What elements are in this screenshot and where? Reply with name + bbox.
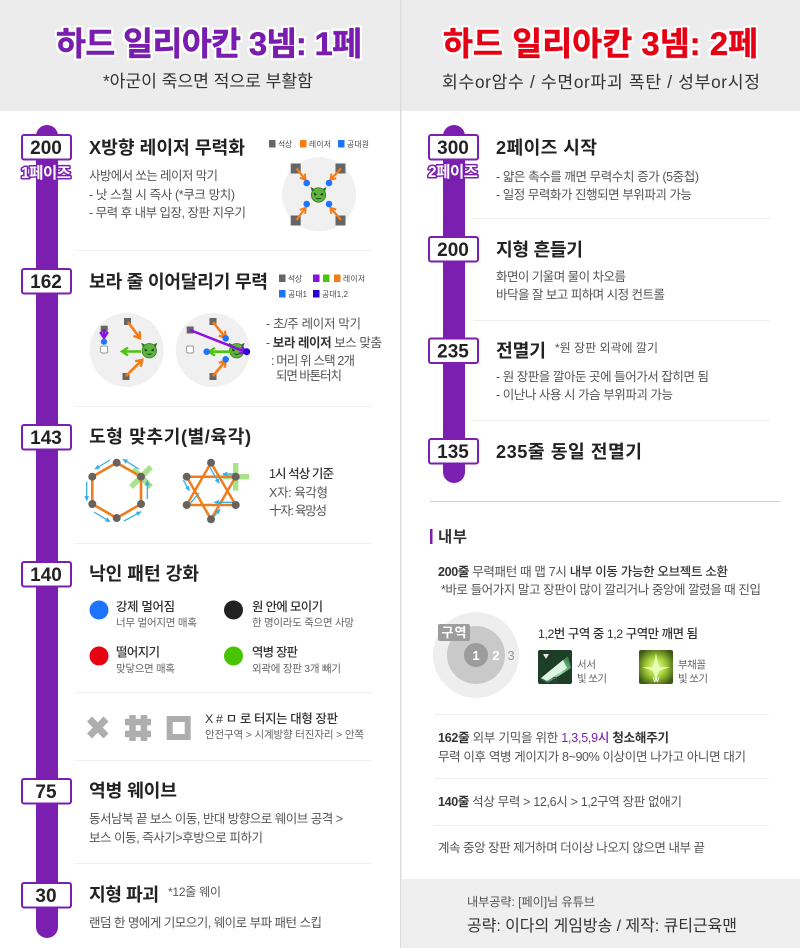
- heading: 도형 맞추기(별/육각): [89, 427, 251, 447]
- hp marker 200: [22, 135, 71, 160]
- panel: left header: [0, 0, 400, 111]
- section: phase 2 start: [428, 135, 699, 202]
- icon: hash: [125, 715, 151, 741]
- heading: 2페이즈 시작: [496, 138, 597, 158]
- skill: standing beam: 서서: [577, 659, 596, 671]
- timeline bar: phase 1: [36, 125, 58, 938]
- panel: right header: [401, 0, 800, 111]
- description: 사방에서 쏘는 레이저 막기: [89, 169, 218, 183]
- hp marker 200: 200: [437, 240, 469, 261]
- item: blue: [90, 600, 197, 629]
- diagram: relay step 2: [176, 313, 250, 387]
- diagram: zones: 3: [507, 648, 515, 663]
- section: plague wave: [22, 779, 343, 845]
- hp marker 75: 75: [35, 782, 57, 803]
- item: red: [90, 646, 175, 675]
- diagram: zones: 구역: [442, 625, 466, 640]
- description: - 보라 레이저 보스 맞춤: [266, 335, 382, 350]
- description: 안전구역 > 시계방향 터진자리 > 안쪽: [205, 729, 364, 741]
- legend: 공대원: [347, 140, 369, 149]
- description: [89, 812, 343, 845]
- skill: cone beam: 빛 쏘기: [678, 673, 708, 685]
- diagram: X laser: [282, 157, 356, 231]
- hp marker 75: [22, 779, 71, 804]
- phase 2 tag: 2페이즈: [428, 163, 478, 181]
- text: ending line: 계속 중앙 장판 제거하며 더이상 나오지 않으면 내부 끝: [438, 841, 705, 855]
- description: 랜덤 한 명에게 기모으기, 웨이로 부파 패턴 스킵: [89, 916, 322, 930]
- item: green: [224, 646, 341, 675]
- intro text: [438, 565, 761, 597]
- skill: standing beam: Q: [552, 677, 558, 684]
- item: blue: 너무 멀어지면 매혹: [116, 616, 197, 629]
- item: green: 외곽에 장판 3개 빼기: [252, 663, 341, 675]
- description: - 원 장판을 깔아둔 곳에 들어가서 잡히면 됨: [496, 370, 709, 384]
- section: large floor patterns: [90, 711, 364, 741]
- item: red: 떨어지기: [116, 646, 160, 660]
- legend: 레이저: [343, 274, 365, 284]
- text: 162 line: [438, 730, 746, 764]
- item: green: 역병 장판: [252, 646, 298, 660]
- legend: 석상: [278, 139, 292, 149]
- heading: 235줄 동일 전멸기: [496, 442, 642, 462]
- legend: [279, 274, 365, 299]
- description: - 초/주 레이저 막기: [266, 317, 361, 331]
- hp marker 30: [22, 883, 71, 908]
- diagram: zones: 2: [492, 648, 500, 663]
- note: *원 장판 외곽에 깔기: [555, 341, 658, 355]
- title: phase 1: 하드 일리아칸 3넴: 1페: [56, 26, 362, 62]
- description: - 일정 무력화가 진행되면 부위파괴 가능: [496, 187, 692, 202]
- skill: cone beam: [639, 650, 708, 685]
- description: [496, 270, 665, 302]
- intro text: 200줄 무력패턴 때 맵 7시 내부 이동 가능한 오브젝트 소환: [438, 565, 728, 579]
- skill: standing beam: 빛 쏘기: [577, 673, 607, 685]
- section: terrain shake: [429, 237, 665, 302]
- heading: 전멸기: [496, 341, 546, 361]
- section: shape matching: [22, 425, 334, 523]
- item: black: 한 명이라도 죽으면 사망: [252, 617, 354, 629]
- subtitle: phase 2: 회수or암수 / 수면or파괴 폭탄 / 성부or시정: [442, 72, 760, 92]
- title: phase 2: 하드 일리아칸 3넴: 2페: [443, 26, 758, 62]
- zone caption: 1,2번 구역 중 1,2 구역만 깨면 됨: [538, 627, 698, 641]
- text: 140 line: 140줄 석상 무력 > 12,6시 > 1,2구역 장판 없애기: [438, 795, 682, 809]
- section: X laser neutralize: [21, 135, 369, 231]
- hp marker 235: 235: [437, 342, 469, 362]
- section: repeat wipe: [429, 439, 642, 464]
- diagram: hexagram: [183, 459, 249, 523]
- description: 바닥을 잘 보고 피하며 시정 컨트롤: [496, 288, 665, 302]
- hp marker 135: 135: [437, 442, 469, 463]
- diagram: relay step 1: [90, 313, 164, 387]
- hp marker 200: 200: [30, 138, 62, 159]
- description: [496, 170, 699, 202]
- hp marker 235: [429, 338, 478, 363]
- description: - 무력 후 내부 입장, 장판 지우기: [89, 206, 246, 220]
- hp marker 140: [22, 562, 71, 586]
- text: 162 line: 무력 이후 역병 게이지가 8~90% 이상이면 나가고 아니면 대기: [438, 750, 746, 764]
- description: [89, 169, 246, 220]
- description: 동서남북 끝 보스 이동, 반대 방향으로 웨이브 공격 >: [89, 812, 343, 826]
- hp marker 162: [22, 269, 71, 294]
- skill: cone beam: 부채꼴: [678, 659, 706, 671]
- heading: 낙인 패턴 강화: [89, 564, 199, 584]
- footer credit: inner guide: 내부공략: [페이]님 유튜브: [467, 895, 595, 909]
- description: [205, 711, 364, 741]
- diagram: zones: 1: [472, 648, 480, 663]
- description: - 이난나 사용 시 가슴 부위파괴 가능: [496, 388, 673, 402]
- section: wipe attack: [429, 338, 709, 402]
- legend: 석상: [288, 274, 302, 284]
- description: [496, 370, 709, 402]
- hp marker 300: [429, 135, 478, 160]
- description: 화면이 기울며 물이 차오름: [496, 270, 626, 284]
- legend: 공대1,2: [322, 290, 348, 299]
- intro text: *바로 들어가지 말고 장판이 많이 깔리거나 중앙에 깔렸을 때 진입: [441, 583, 761, 597]
- description: 1시 석상 기준: [269, 467, 334, 481]
- legend: 레이저: [309, 139, 331, 149]
- description: [269, 467, 334, 518]
- description: 十자: 육망성: [269, 504, 327, 518]
- diagram: hexagon: [87, 459, 151, 522]
- description: X # ㅁ 로 터지는 대형 장판: [205, 711, 338, 726]
- heading: X방향 레이저 무력화: [89, 138, 245, 158]
- section: purple line relay: [22, 269, 382, 387]
- item: black: [224, 600, 354, 629]
- section: terrain destruction: [22, 883, 322, 930]
- hp marker 162: 162: [30, 272, 62, 293]
- hp marker 143: 143: [30, 428, 62, 449]
- item: blue: 강제 멀어짐: [116, 600, 175, 614]
- text: 162 line: 162줄 외부 기믹을 위한 1,3,5,9시 청소해주기: [438, 730, 669, 745]
- hp marker 200: [429, 237, 478, 262]
- section: brand patterns: [22, 562, 354, 675]
- hp marker 135: [429, 439, 478, 464]
- item: black: 원 안에 모이기: [252, 600, 323, 614]
- legend: 공대1: [288, 290, 307, 299]
- description: 되면 바톤터치: [276, 369, 342, 383]
- footer credit: authors: 공략: 이다의 게임방송 / 제작: 큐티근육맨: [467, 917, 737, 935]
- skill: standing beam: [538, 650, 607, 685]
- heading: 지형 흔들기: [496, 240, 583, 260]
- description: : 머리 위 스택 2개: [271, 354, 355, 368]
- timeline bar: phase 2: [443, 125, 465, 483]
- panel: inner phase: [430, 528, 761, 855]
- heading: 지형 파괴: [89, 885, 159, 905]
- item: red: 맞닿으면 매혹: [116, 662, 175, 675]
- panel: footer: [401, 879, 800, 948]
- hp marker 143: [22, 425, 71, 450]
- heading: 보라 줄 이어달리기 무력: [89, 272, 268, 292]
- legend: [269, 139, 369, 149]
- heading: inner: 내부: [438, 528, 467, 546]
- heading: 역병 웨이브: [89, 781, 177, 801]
- icon: X: [90, 719, 106, 736]
- description: 보스 이동, 즉사기>후방으로 피하기: [89, 831, 263, 845]
- description: - 얇은 촉수를 깨면 무력수치 증가 (5중첩): [496, 170, 699, 184]
- hp marker 140: 140: [30, 565, 62, 586]
- diagram: zones: [433, 612, 519, 698]
- description: X자: 육각형: [269, 486, 328, 500]
- note: *12줄 웨이: [168, 885, 221, 899]
- hp marker 300: 300: [437, 138, 469, 159]
- skill: cone beam: W: [653, 677, 660, 684]
- subtitle: phase 1: *아군이 죽으면 적으로 부활함: [103, 71, 313, 91]
- hp marker 30: 30: [35, 886, 57, 907]
- description: - 낫 스칠 시 즉사 (*쿠크 망치): [89, 188, 235, 202]
- description: [266, 317, 382, 383]
- icon: square: [170, 719, 188, 737]
- phase 1 tag: 1페이즈: [21, 164, 71, 182]
